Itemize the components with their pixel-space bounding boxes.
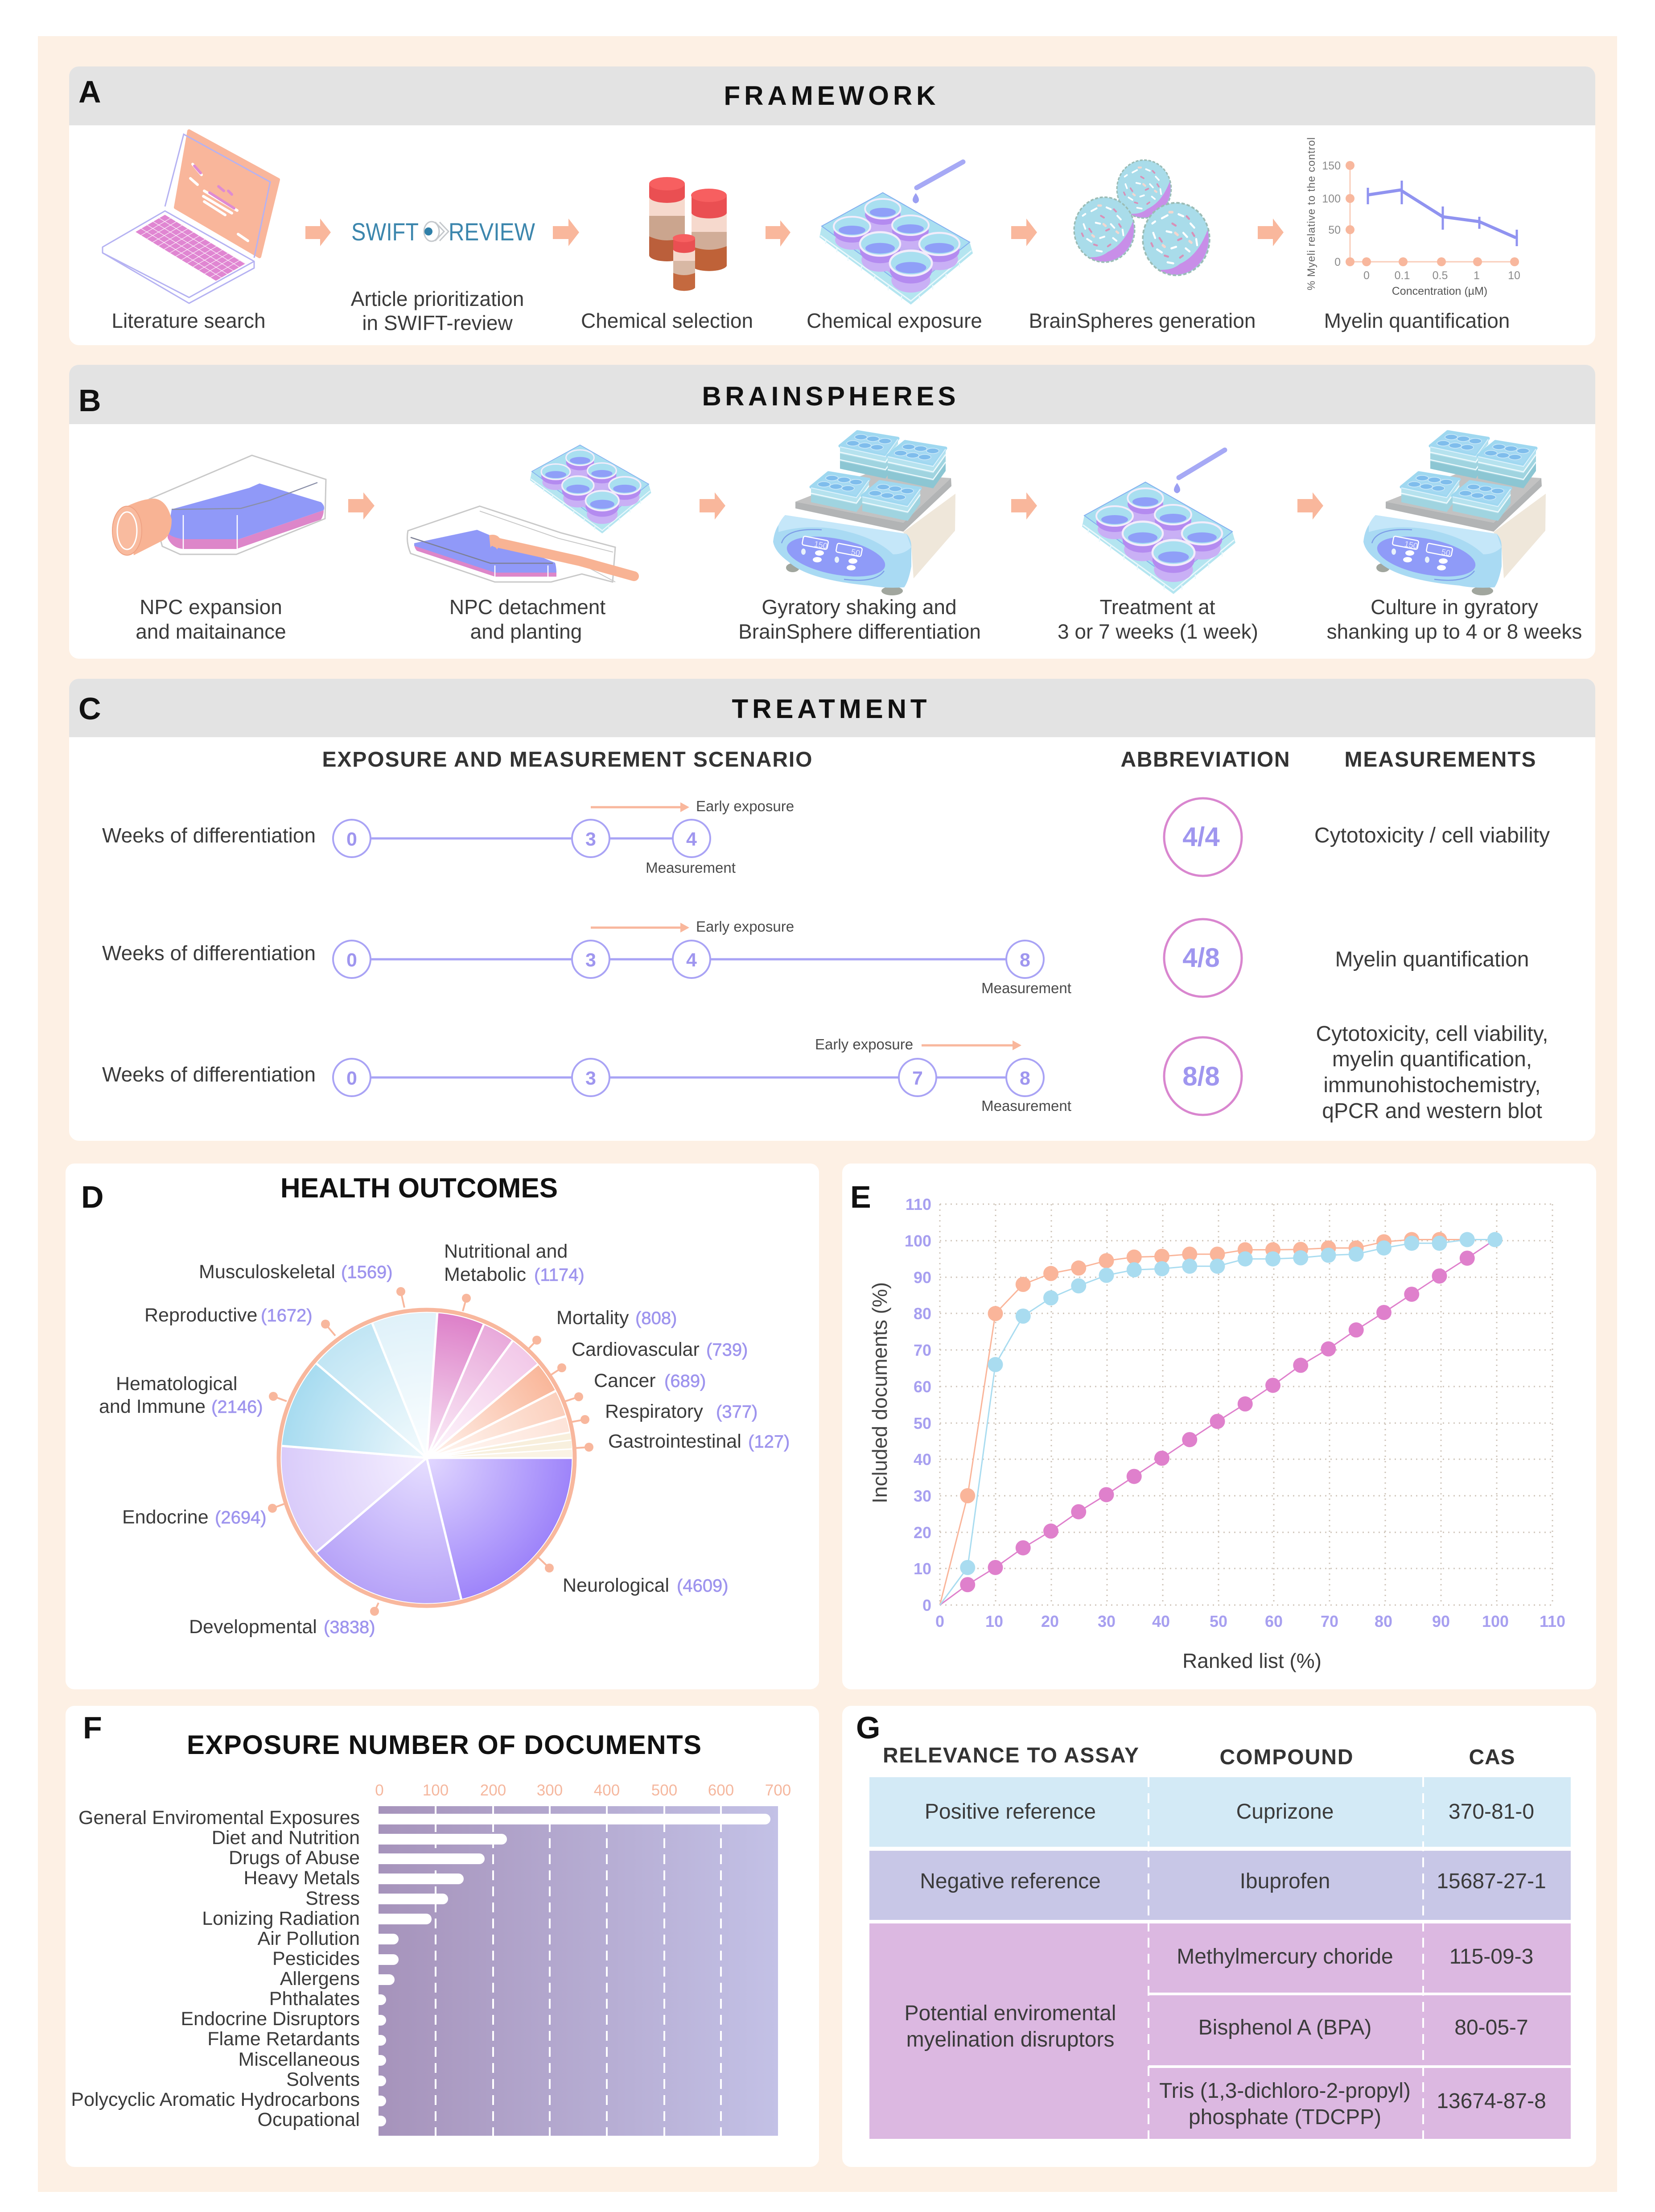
bar chart background [379, 1806, 778, 2136]
pie chart [279, 1310, 575, 1606]
table row: negative reference [869, 1851, 1571, 1920]
panel letter A: A [78, 74, 101, 109]
panel D: health outcomes [66, 1164, 819, 1689]
table row: potential disruptors: Bisphenol A (BPA) [1198, 2016, 1371, 2039]
icon: culture flask with cap [112, 455, 326, 555]
heading: health outcomes: HEALTH OUTCOMES [280, 1173, 558, 1204]
series: pink [940, 1240, 1495, 1605]
label: treatment: Treatment at [1099, 595, 1215, 619]
label: chemical exposure: Chemical exposure [807, 309, 982, 332]
panel E: ranked list chart [842, 1164, 1596, 1689]
table row: potential disruptors: Methylmercury choride [1177, 1945, 1393, 1969]
bar labels: Miscellaneous [239, 2049, 360, 2070]
measurement text row 2: Myelin quantification [1335, 948, 1529, 971]
bar labels: Pesticides [272, 1948, 360, 1969]
pie labels: (127) [748, 1432, 790, 1452]
pie labels: Mortality [556, 1307, 629, 1329]
icon: gyratory shaker: 150 [813, 539, 828, 551]
y axis ticks: 110 [906, 1195, 931, 1213]
mini line chart: myelin vs concentration: % Myeli relative to the control [1305, 137, 1317, 290]
pie labels: (3838) [324, 1618, 375, 1637]
icon: gyratory shaker: 50 [1441, 547, 1451, 558]
pie labels: (689) [664, 1371, 706, 1391]
table row: potential disruptors: 80-05-7 [1454, 2016, 1528, 2039]
row 1 timeline 4/4: Early exposure [696, 798, 794, 814]
bar labels: Ocupational [258, 2109, 360, 2130]
row 1 timeline 4/4: 3 [585, 829, 596, 850]
row 2 timeline 4/8 [102, 918, 1071, 996]
row 1 timeline 4/4: Measurement [646, 859, 736, 876]
arrow [1011, 219, 1037, 246]
table row: positive reference: Positive reference [925, 1800, 1096, 1824]
icon: flask with scraper and plate [407, 445, 651, 582]
arrow [1258, 219, 1284, 246]
column heading: measurements: MEASUREMENTS [1345, 748, 1536, 772]
label: myelin quantification: Myelin quantification [1324, 309, 1510, 332]
panel letter B: B [78, 383, 101, 418]
x axis labels: 400 [594, 1782, 620, 1799]
pie labels [99, 1241, 790, 1638]
logo: SWIFT-Review: SWIFT [351, 218, 419, 246]
pie labels: Metabolic [444, 1264, 526, 1285]
mini line chart: myelin vs concentration: 0 [1363, 269, 1370, 282]
x axis labels: 700 [765, 1782, 791, 1799]
x axis ticks: 110 [1540, 1612, 1565, 1630]
bar labels: Flame Retardants [207, 2028, 360, 2050]
bar labels: Lonizing Radiation [202, 1908, 360, 1929]
table headers: COMPOUND [1220, 1746, 1353, 1769]
y axis title: Included documents (%) [868, 1282, 891, 1503]
panel letter D: D [81, 1180, 104, 1214]
row 1 timeline 4/4: 0 [346, 829, 357, 850]
row 2 timeline 4/8: Measurement [981, 980, 1071, 996]
label: culture: Culture in gyratory [1371, 595, 1538, 619]
x axis ticks: 80 [1375, 1612, 1392, 1630]
logo: SWIFT-Review [351, 218, 535, 246]
table headers [883, 1744, 1515, 1769]
pie labels: and Immune [99, 1396, 206, 1417]
pie labels: Reproductive [144, 1304, 257, 1326]
heading: exposure number of documents: EXPOSURE NUMBER OF DOCUMENTS [187, 1730, 701, 1760]
panel G: compound table [842, 1706, 1596, 2167]
label: brainspheres generation: BrainSpheres generation [1029, 309, 1256, 332]
row 3 timeline 8/8: 3 [585, 1068, 596, 1089]
mini line chart: myelin vs concentration [1305, 137, 1520, 297]
x axis labels: 100 [423, 1782, 449, 1799]
icon: gyratory shaker: 150 [1404, 539, 1419, 551]
bar chart grid lines [436, 1806, 721, 2136]
header bar A [69, 66, 1595, 125]
table headers: RELEVANCE TO ASSAY [883, 1744, 1139, 1767]
mini line chart: myelin vs concentration: 0 [1334, 256, 1341, 268]
arrow [305, 219, 331, 246]
panel B: brainspheres [69, 365, 1595, 659]
label: culture [1327, 595, 1582, 643]
icon: well plate with pipette [1082, 450, 1235, 594]
pie labels: (4609) [677, 1576, 729, 1596]
abbreviation badge 4/4 [1164, 798, 1242, 876]
measurement text row 3: myelin quantification, [1332, 1048, 1532, 1071]
row 3 timeline 8/8: Early exposure [815, 1036, 913, 1052]
row 2 timeline 4/8: Weeks of differentiation [102, 941, 316, 965]
table row: potential disruptors: Tris (1,3-dichloro-2-propyl) [1159, 2079, 1411, 2103]
table row: positive reference: 370-81-0 [1449, 1800, 1534, 1824]
table row: potential disruptors: phosphate (TDCPP) [1189, 2105, 1381, 2129]
icon: brainspheres [1074, 160, 1210, 275]
pie labels: (2146) [211, 1397, 263, 1417]
panel C: treatment [69, 679, 1595, 1141]
x axis ticks [935, 1612, 1565, 1630]
row 3 timeline 8/8: 0 [346, 1068, 357, 1089]
y axis ticks: 30 [914, 1487, 931, 1505]
bar labels: Solvents [286, 2069, 360, 2090]
pie labels: (377) [716, 1402, 758, 1422]
x axis ticks: 40 [1152, 1612, 1170, 1630]
mini line chart: myelin vs concentration: 100 [1322, 193, 1341, 205]
row 1 timeline 4/4: Weeks of differentiation [102, 824, 316, 847]
measurement text row 3: Cytotoxicity, cell viability, [1316, 1022, 1548, 1046]
table row: negative reference: Ibuprofen [1240, 1869, 1330, 1893]
pie labels: Cardiovascular [572, 1339, 700, 1360]
panel A: framework [69, 66, 1595, 345]
pie labels: Neurological [563, 1575, 669, 1596]
table row: potential disruptors: 115-09-3 [1449, 1945, 1533, 1969]
x axis ticks: 100 [1482, 1612, 1509, 1630]
arrow [1011, 492, 1037, 520]
measurement text row 1: Cytotoxicity / cell viability [1314, 824, 1550, 847]
table row: potential disruptors [869, 1923, 1571, 2139]
table row: positive reference [869, 1777, 1571, 1847]
bar labels: Diet and Nutrition [212, 1827, 360, 1849]
row 2 timeline 4/8: Early exposure [696, 918, 794, 935]
row 1 timeline 4/4 [102, 798, 794, 876]
x axis ticks: 10 [985, 1612, 1003, 1630]
table row: potential disruptors: myelination disruptors [906, 2028, 1114, 2051]
row 3 timeline 8/8: Measurement [981, 1098, 1071, 1114]
y axis ticks: 70 [914, 1341, 931, 1359]
label: literature search: Literature search [111, 309, 266, 332]
icon: gyratory shaker [773, 432, 955, 595]
x axis labels [375, 1782, 791, 1799]
arrow [1297, 492, 1323, 520]
bar labels: Allergens [280, 1968, 360, 1989]
table row: negative reference: 15687-27-1 [1437, 1869, 1546, 1893]
x axis title: Ranked list (%) [1182, 1649, 1322, 1672]
mini line chart: myelin vs concentration: Concentration (µM) [1392, 285, 1487, 297]
mini line chart: myelin vs concentration: 0.5 [1433, 269, 1448, 282]
pie labels: Gastrointestinal [608, 1431, 741, 1452]
x axis ticks: 90 [1432, 1612, 1450, 1630]
y axis ticks: 80 [914, 1304, 931, 1323]
label: article prioritization: in SWIFT-review [362, 311, 513, 334]
y axis ticks: 50 [914, 1414, 931, 1432]
bars [379, 1814, 770, 2126]
panel letter G: G [856, 1710, 880, 1745]
label: NPC detachment: NPC detachment [449, 595, 605, 619]
table column separators [1149, 1777, 1423, 2139]
table row: negative reference: Negative reference [920, 1869, 1101, 1893]
pie labels: Respiratory [605, 1401, 703, 1422]
column heading: abbreviation: ABBREVIATION [1121, 748, 1289, 772]
table row: potential disruptors: 13674-87-8 [1437, 2089, 1546, 2113]
pie labels: (1569) [341, 1263, 393, 1282]
arrow [766, 220, 790, 247]
bar labels: Polycyclic Aromatic Hydrocarbons [71, 2089, 360, 2110]
x axis ticks: 20 [1041, 1612, 1059, 1630]
y axis ticks: 90 [914, 1268, 931, 1287]
pie labels: (739) [706, 1340, 748, 1360]
y axis ticks: 10 [914, 1560, 931, 1578]
column heading: scenario: EXPOSURE AND MEASUREMENT SCENARIO [322, 748, 812, 772]
mini line chart: myelin vs concentration: 0.1 [1395, 269, 1410, 282]
mini line chart: myelin vs concentration: 150 [1322, 160, 1341, 172]
row 3 timeline 8/8 [102, 1036, 1071, 1114]
pie labels: (1672) [261, 1306, 313, 1325]
panel F: exposure number of documents [66, 1706, 819, 2167]
label: treatment: 3 or 7 weeks (1 week) [1058, 620, 1258, 643]
y axis ticks: 0 [922, 1596, 931, 1614]
x axis ticks: 70 [1321, 1612, 1338, 1630]
header bar C [69, 679, 1595, 737]
x axis labels: 200 [480, 1782, 506, 1799]
arrow [700, 492, 725, 520]
pie labels: Developmental [189, 1616, 317, 1638]
panel letter C: C [78, 691, 101, 726]
row 1 timeline 4/4: 4 [686, 829, 697, 850]
x axis labels: 600 [708, 1782, 734, 1799]
label: culture: shanking up to 4 or 8 weeks [1327, 620, 1582, 643]
bar labels: General Enviromental Exposures [78, 1807, 360, 1828]
bar labels: Heavy Metals [244, 1867, 360, 1889]
label: NPC expansion: NPC expansion [140, 595, 282, 619]
header bar B [69, 365, 1595, 424]
bar labels: Endocrine Disruptors [181, 2008, 360, 2030]
row 2 timeline 4/8: 4 [686, 949, 697, 971]
x axis ticks: 30 [1098, 1612, 1116, 1630]
series: peach [940, 1232, 1495, 1605]
label: gyratory shaking [738, 595, 981, 643]
mini line chart: myelin vs concentration: 50 [1328, 224, 1341, 236]
abbreviation badge 8/8 [1164, 1037, 1242, 1115]
pie labels: Endocrine [122, 1506, 209, 1528]
logo: SWIFT-Review: REVIEW [449, 218, 535, 246]
label: chemical selection: Chemical selection [581, 309, 753, 332]
arrow [348, 492, 375, 520]
pie labels: Cancer [594, 1370, 656, 1391]
table row: potential disruptors: Potential enviromental [905, 2002, 1116, 2025]
label: NPC expansion: and maitainance [136, 620, 286, 643]
y axis ticks: 60 [914, 1378, 931, 1396]
mini line chart: myelin vs concentration: 10 [1508, 269, 1520, 282]
heading: treatment: TREATMENT [732, 694, 926, 724]
x axis labels: 0 [375, 1782, 384, 1799]
y axis ticks: 40 [914, 1450, 931, 1469]
row 3 timeline 8/8: 7 [912, 1068, 923, 1089]
row 3 timeline 8/8: Weeks of differentiation [102, 1063, 316, 1086]
abbreviation badge 4/8 [1164, 919, 1242, 997]
row 3 timeline 8/8: 8 [1020, 1068, 1030, 1089]
bar labels [71, 1807, 360, 2130]
y axis ticks: 20 [914, 1523, 931, 1542]
pie labels: Hematological [116, 1373, 237, 1395]
icon: well plate with pipette [819, 162, 973, 305]
label: NPC detachment: and planting [470, 620, 582, 643]
icon: gyratory shaker: 50 [850, 547, 861, 558]
label: gyratory shaking: BrainSphere differentiation [738, 620, 981, 643]
label: article prioritization [351, 287, 524, 334]
panel letter E: E [850, 1180, 871, 1214]
x axis labels: 300 [537, 1782, 563, 1799]
row 2 timeline 4/8: 0 [346, 949, 357, 971]
bar labels: Phthalates [269, 1988, 360, 2010]
label: NPC expansion [136, 595, 286, 643]
bar labels: Stress [305, 1888, 360, 1909]
pie labels: (2694) [215, 1508, 267, 1527]
pie labels: Musculoskeletal [199, 1261, 335, 1283]
y axis ticks [905, 1195, 931, 1614]
chart grid [940, 1204, 1552, 1605]
abbreviation badge 8/8: 8/8 [1182, 1061, 1220, 1091]
pie labels: (1174) [534, 1265, 585, 1285]
pie labels: (808) [635, 1308, 677, 1328]
bar labels: Air Pollution [258, 1928, 360, 1949]
y axis ticks: 100 [905, 1232, 931, 1250]
x axis ticks: 50 [1210, 1612, 1227, 1630]
table headers: CAS [1469, 1746, 1515, 1769]
x axis ticks: 0 [935, 1612, 944, 1630]
measurement text row 3 [1316, 1022, 1548, 1123]
label: article prioritization: Article prioritization [351, 287, 524, 310]
series: blue [940, 1232, 1503, 1605]
abbreviation badge 4/4: 4/4 [1182, 822, 1220, 852]
icon: laptop [103, 131, 278, 303]
row 2 timeline 4/8: 8 [1020, 949, 1030, 971]
icon: chemical bottles [649, 177, 727, 291]
arrow [553, 219, 579, 246]
row 2 timeline 4/8: 3 [585, 949, 596, 971]
panel letter F: F [83, 1710, 102, 1745]
label: treatment [1058, 595, 1258, 643]
icon: gyratory shaker [1363, 432, 1546, 595]
label: gyratory shaking: Gyratory shaking and [762, 595, 957, 619]
pie label stems [268, 1287, 593, 1616]
x axis ticks: 60 [1265, 1612, 1283, 1630]
abbreviation badge 4/8: 4/8 [1182, 943, 1220, 973]
heading: framework: FRAMEWORK [724, 81, 935, 111]
pie labels: Nutritional and [444, 1241, 568, 1262]
measurement text row 3: qPCR and western blot [1322, 1099, 1542, 1123]
label: NPC detachment [449, 595, 605, 643]
table row: positive reference: Cuprizone [1236, 1800, 1334, 1824]
heading: brainspheres: BRAINSPHERES [702, 381, 956, 411]
measurement text row 3: immunohistochemistry, [1323, 1073, 1541, 1097]
bar labels: Drugs of Abuse [229, 1847, 360, 1869]
x axis labels: 500 [651, 1782, 677, 1799]
mini line chart: myelin vs concentration: 1 [1474, 269, 1480, 282]
